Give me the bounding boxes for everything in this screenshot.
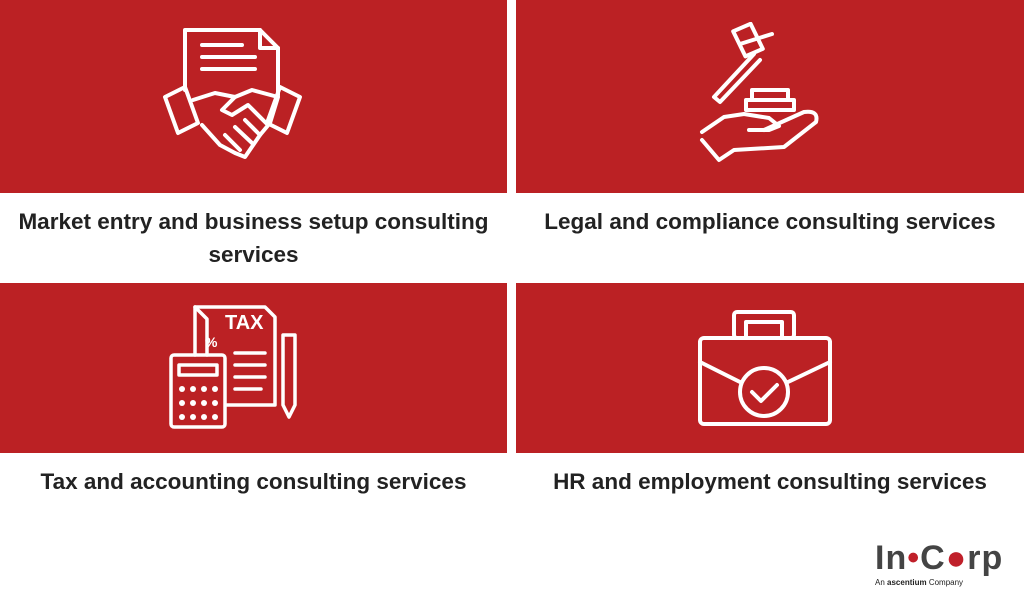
text: HR: HR and employment consulting services (553, 469, 987, 494)
panel: tax (0, 283, 507, 453)
icon: handshake (163, 28, 302, 159)
icon: tax documents calculator pencil (169, 305, 297, 429)
text: tax: Tax and accounting consulting services (41, 469, 466, 494)
panel: legal (516, 0, 1024, 193)
icon: tax documents calculator pencil: % (205, 334, 218, 350)
text: market entry (18, 209, 489, 267)
panel: market entry (0, 0, 507, 193)
logo: InCorp: In•C●rp (875, 539, 1003, 577)
icon: briefcase with check (698, 310, 832, 426)
logo: InCorp: An ascentium Company (875, 578, 963, 587)
text: market entry: Market entry and business setup consulting (18, 209, 489, 234)
text: market entry: services (208, 242, 299, 267)
icon: gavel in hand (700, 22, 818, 162)
text: legal: Legal and compliance consulting services (544, 209, 996, 234)
panel: HR (516, 283, 1024, 453)
icon: tax documents calculator pencil: TAX (225, 312, 264, 334)
